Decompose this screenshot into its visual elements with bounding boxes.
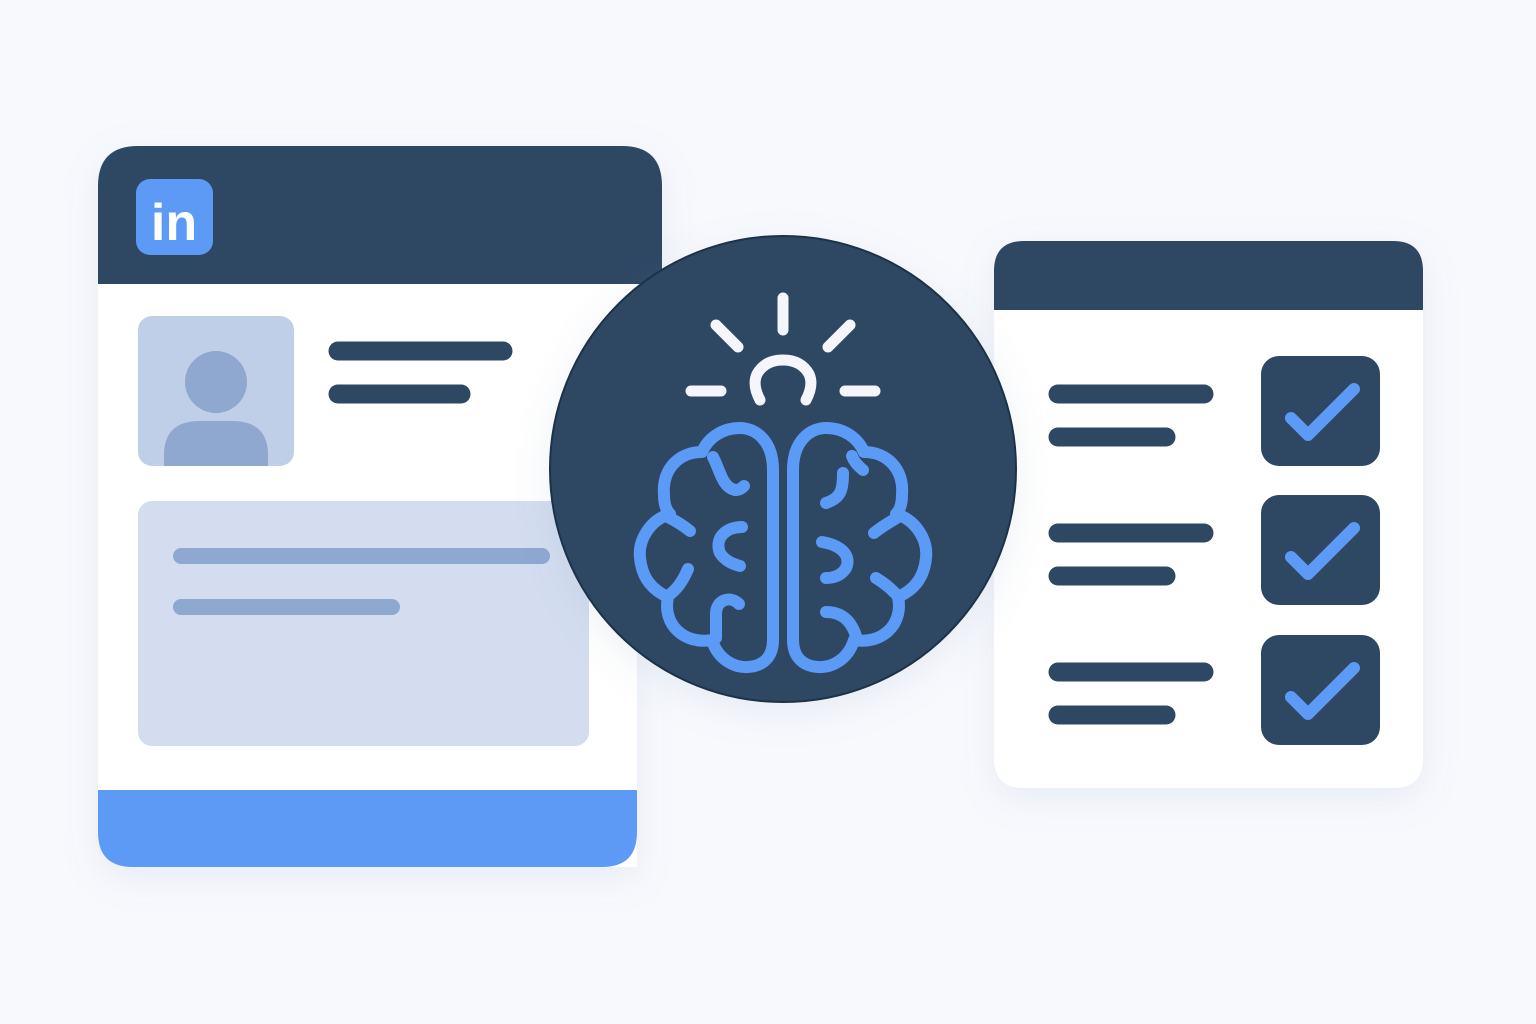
checklist header — [994, 241, 1423, 310]
panel: checklist card — [994, 241, 1423, 788]
icon: brain — [640, 428, 926, 667]
checklist item 3 — [1058, 635, 1380, 745]
icon: linkedin logo — [136, 179, 213, 255]
card header — [98, 146, 662, 284]
icon: avatar — [138, 316, 294, 466]
checklist item 1 — [1058, 356, 1380, 466]
icon: lightbulb rays — [691, 298, 875, 400]
panel: central brain circle — [550, 236, 1016, 702]
content box — [138, 501, 589, 746]
card footer bar — [98, 790, 637, 867]
name text lines — [338, 351, 503, 394]
checklist item 2 — [1058, 495, 1380, 605]
icon: linkedin logo: in — [151, 194, 197, 252]
panel: linkedin profile card — [98, 146, 662, 867]
